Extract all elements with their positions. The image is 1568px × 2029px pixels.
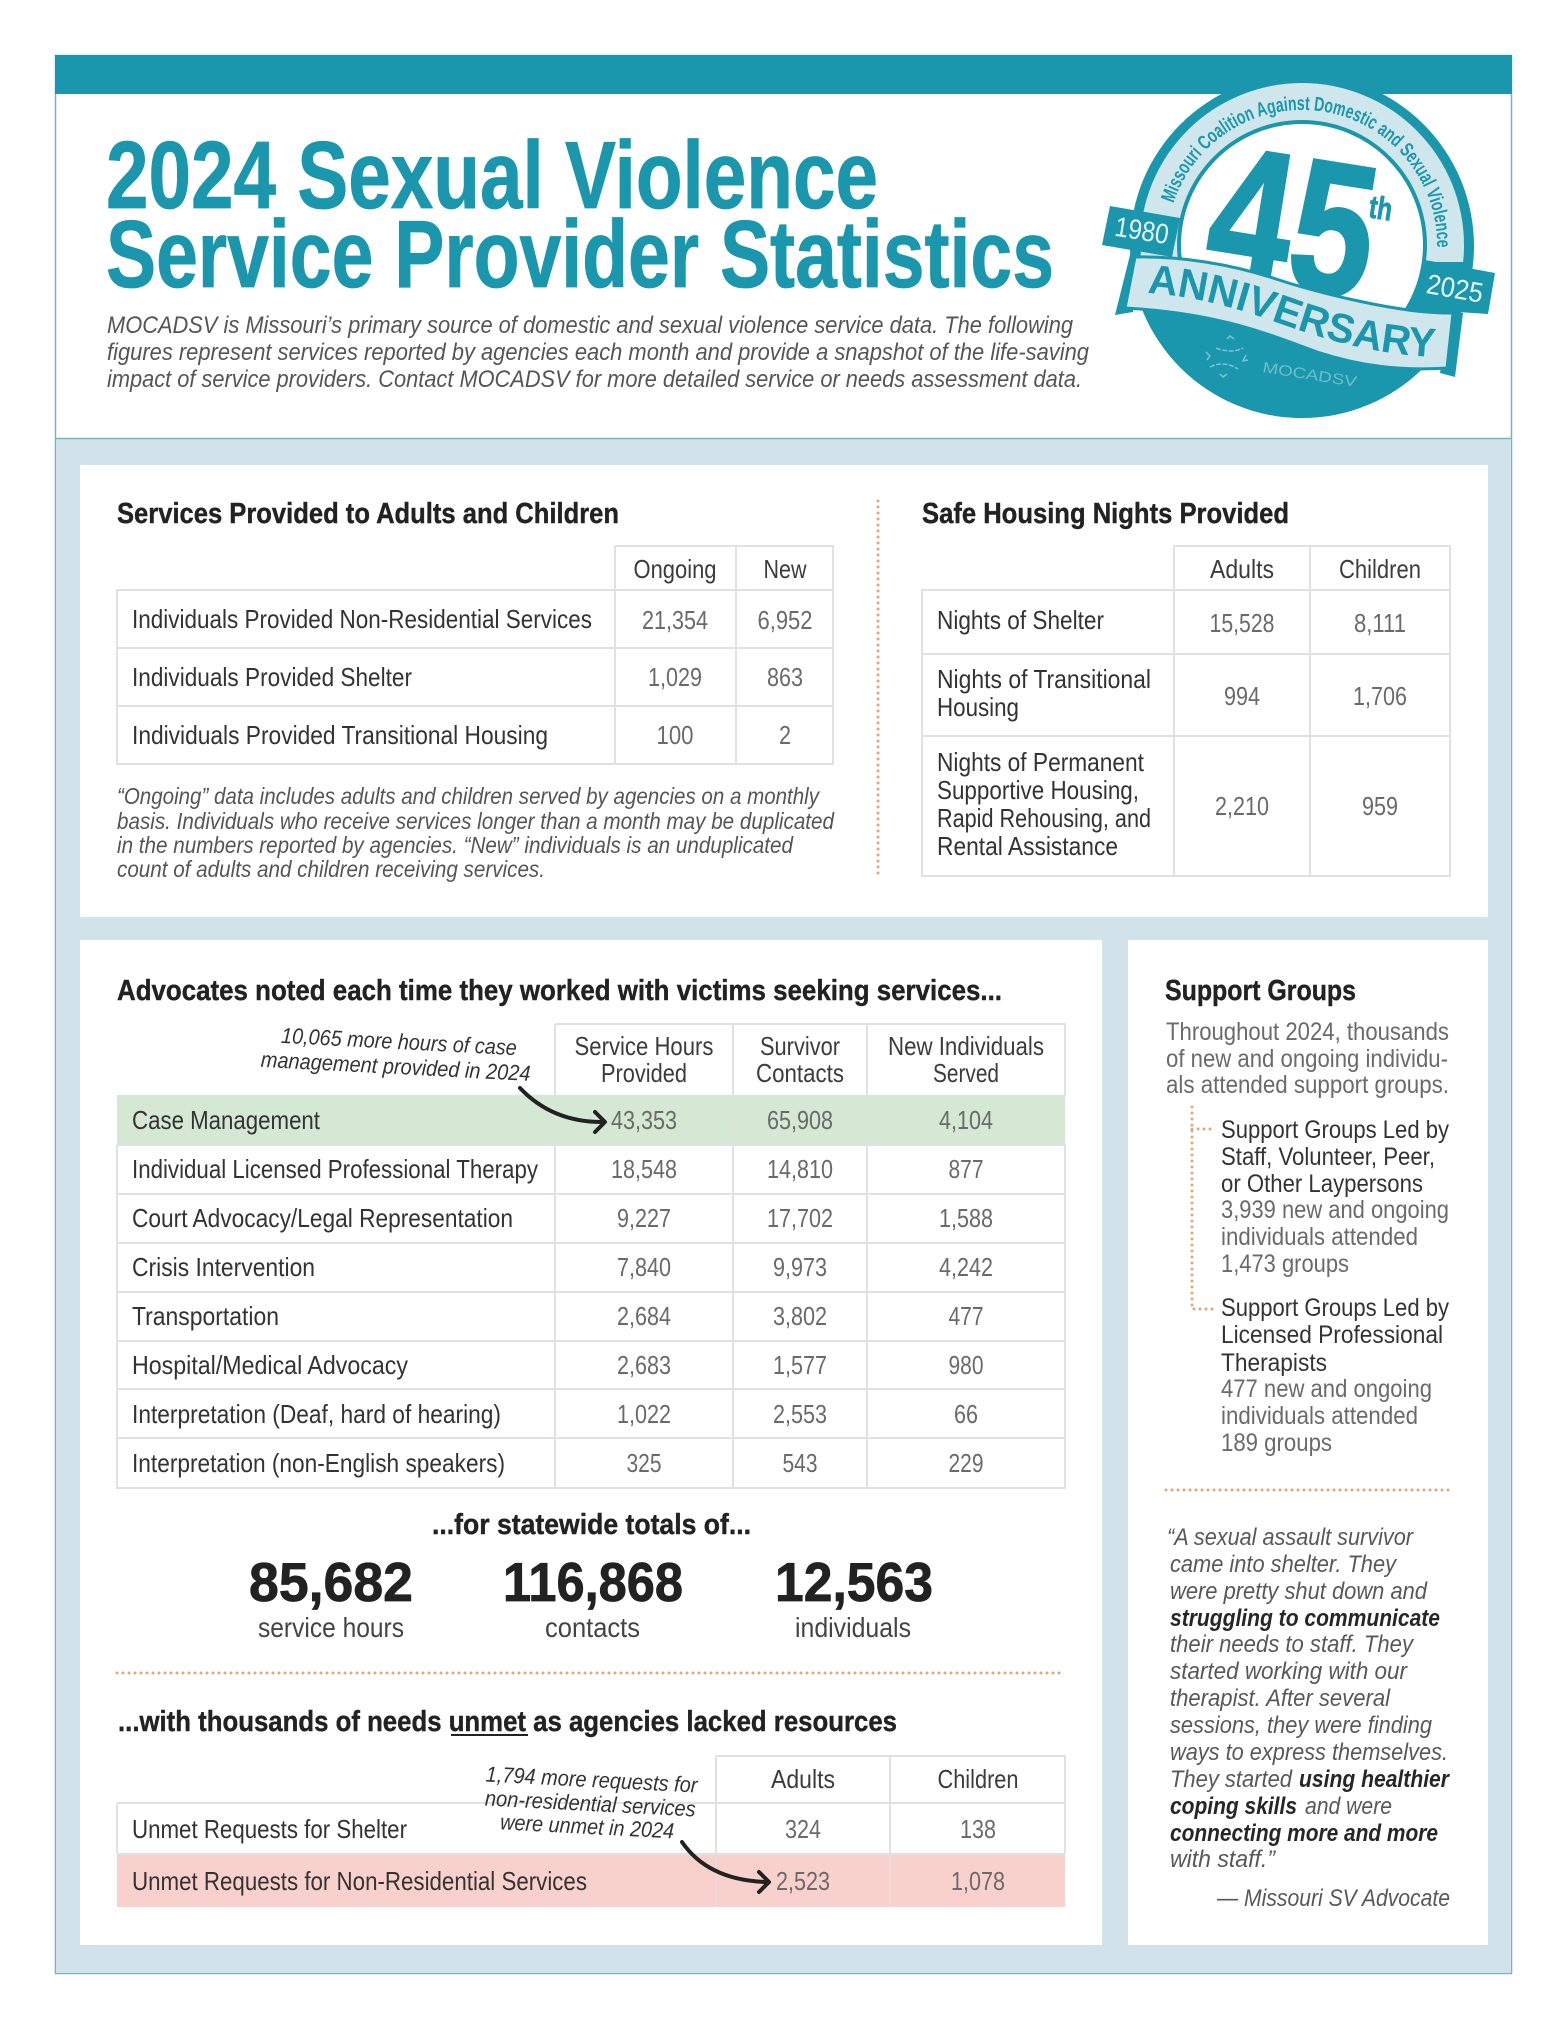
table: services by type: 66 bbox=[954, 1399, 978, 1429]
table: housing: Rapid Rehousing, and bbox=[937, 803, 1151, 833]
stat: contacts: contacts bbox=[545, 1612, 640, 1643]
table: unmet requests: 324 bbox=[785, 1814, 821, 1844]
table: services by type: 1,588 bbox=[939, 1203, 993, 1233]
support group item: lay led bbox=[1221, 1116, 1449, 1278]
table: unmet requests bbox=[117, 1756, 1065, 1907]
badge year tab 2025 bbox=[1412, 260, 1495, 314]
table: services by type: 877 bbox=[948, 1154, 984, 1184]
panel: support groups bbox=[1128, 940, 1488, 1945]
table: services: Individuals Provided Non-Residential Services bbox=[132, 604, 592, 634]
intro text bbox=[107, 312, 1090, 393]
table: services: Ongoing bbox=[634, 554, 716, 584]
quote: ways to express themselves. bbox=[1170, 1739, 1448, 1766]
quote: came into shelter. They bbox=[1170, 1551, 1398, 1578]
table: services: 6,952 bbox=[758, 605, 812, 635]
quote: sessions, they were finding bbox=[1170, 1712, 1433, 1739]
stat: service hours: service hours bbox=[258, 1612, 404, 1643]
table: services by type: Contacts bbox=[756, 1058, 844, 1088]
quote attribution: — Missouri SV Advocate bbox=[1216, 1885, 1450, 1912]
table: unmet requests: Unmet Requests for Shelter bbox=[132, 1814, 407, 1844]
intro text: impact of service providers. Contact MOCADSV for more detailed service or needs assessment data. bbox=[107, 366, 1082, 393]
table: housing: Nights of Permanent bbox=[937, 747, 1145, 777]
quote: therapist. After several bbox=[1170, 1685, 1391, 1712]
support group item: lay led: or Other Laypersons bbox=[1221, 1170, 1423, 1198]
table: services by type: Court Advocacy/Legal Representation bbox=[132, 1203, 513, 1233]
support group item: therapist led: Licensed Professional bbox=[1221, 1321, 1443, 1349]
table: services by type: Served bbox=[933, 1058, 999, 1088]
support group item: lay led: Support Groups Led by bbox=[1221, 1116, 1449, 1144]
table: services by type: 477 bbox=[948, 1301, 984, 1331]
table: unmet requests: Children bbox=[938, 1764, 1018, 1794]
table: housing: 15,528 bbox=[1210, 608, 1274, 638]
table: services by type: 980 bbox=[948, 1350, 984, 1380]
table: services by type: Crisis Intervention bbox=[132, 1252, 315, 1282]
table: housing: Housing bbox=[937, 692, 1019, 722]
quote: using healthier bbox=[1299, 1766, 1450, 1793]
table: services by type: Individual Licensed Professional Therapy bbox=[132, 1154, 538, 1184]
table: housing bbox=[922, 546, 1450, 876]
icon: 45th anniversary badge bbox=[1102, 83, 1495, 418]
header bbox=[106, 122, 1090, 393]
callout: unmet requests: non-residential services bbox=[484, 1786, 696, 1822]
highlight row: case management bbox=[117, 1095, 1065, 1145]
quote: started working with our bbox=[1170, 1658, 1408, 1685]
title: Service Provider Statistics bbox=[106, 201, 1054, 308]
table: services by type: 325 bbox=[626, 1448, 662, 1478]
intro text: figures represent services reported by agencies each month and provide a snapshot of the life-saving bbox=[107, 339, 1090, 366]
heading: housing: Safe Housing Nights Provided bbox=[922, 498, 1289, 530]
badge faint logo bbox=[1206, 336, 1358, 391]
table: housing: Rental Assistance bbox=[937, 831, 1118, 861]
quote: connecting more and more bbox=[1170, 1820, 1438, 1847]
callout: unmet requests: were unmet in 2024 bbox=[500, 1809, 675, 1843]
support group item: lay led: individuals attended bbox=[1221, 1223, 1418, 1251]
intro text: MOCADSV is Missouri’s primary source of domestic and sexual violence service data. The following bbox=[107, 312, 1074, 339]
quote: with staff.” bbox=[1170, 1846, 1276, 1873]
callout: case management hours: 10,065 more hours of case bbox=[280, 1023, 517, 1060]
support group item: lay led: Staff, Volunteer, Peer, bbox=[1221, 1143, 1435, 1171]
callout: case management hours bbox=[260, 1022, 532, 1086]
table: services by type: 2,684 bbox=[617, 1301, 671, 1331]
badge ordinal: th bbox=[1367, 189, 1395, 228]
table: services: 100 bbox=[656, 720, 694, 750]
table: services: New bbox=[764, 554, 807, 584]
table: services by type: 1,577 bbox=[773, 1350, 827, 1380]
support groups intro: als attended support groups. bbox=[1166, 1071, 1449, 1099]
table: services by type: 1,022 bbox=[617, 1399, 671, 1429]
table: housing: 8,111 bbox=[1354, 608, 1406, 638]
table: services by type: 14,810 bbox=[767, 1154, 833, 1184]
top teal bar bbox=[55, 55, 1512, 94]
table: services by type: Transportation bbox=[132, 1301, 279, 1331]
title bbox=[106, 122, 1054, 308]
badge year tab 1980: 1980 bbox=[1113, 211, 1171, 250]
badge ring text: Missouri Coalition Against Domestic and Sexual Violence bbox=[1160, 96, 1448, 247]
callout: unmet requests bbox=[483, 1762, 700, 1845]
support groups intro bbox=[1166, 1018, 1449, 1099]
footnote: in the numbers reported by agencies. “New” individuals is an unduplicated bbox=[117, 832, 794, 858]
stat: service hours bbox=[249, 1551, 413, 1643]
table: services by type: 2,553 bbox=[773, 1399, 827, 1429]
table: housing: 959 bbox=[1362, 791, 1398, 821]
table: services: Individuals Provided Transitional Housing bbox=[132, 720, 548, 750]
table: housing: Supportive Housing, bbox=[937, 775, 1139, 805]
footnote bbox=[117, 783, 835, 882]
table: services: 2 bbox=[779, 720, 791, 750]
badge ribbon text: ANNIVERSARY bbox=[1148, 266, 1436, 356]
heading: statewide totals: ...for statewide totals of... bbox=[432, 1509, 751, 1541]
highlight row: non-residential bbox=[117, 1854, 1065, 1907]
heading: services: Services Provided to Adults and Children bbox=[117, 498, 619, 530]
stat: contacts bbox=[503, 1551, 683, 1643]
support group item: lay led: 3,939 new and ongoing bbox=[1221, 1196, 1449, 1224]
footnote: “Ongoing” data includes adults and children served by agencies on a monthly bbox=[117, 783, 820, 809]
table: services by type: 4,104 bbox=[939, 1105, 993, 1135]
table: housing: 2,210 bbox=[1215, 791, 1269, 821]
heading: advocates: Advocates noted each time they worked with victims seeking services... bbox=[117, 975, 1002, 1007]
table: services by type: Hospital/Medical Advocacy bbox=[132, 1350, 408, 1380]
support group item: therapist led bbox=[1221, 1294, 1449, 1457]
table: services by type: Interpretation (Deaf, hard of hearing) bbox=[132, 1399, 501, 1429]
table: services by type: 229 bbox=[948, 1448, 984, 1478]
table: services by type: Service Hours bbox=[574, 1031, 714, 1061]
quote: “A sexual assault survivor bbox=[1167, 1524, 1414, 1551]
table: services bbox=[117, 546, 833, 764]
table: services by type: Interpretation (non-English speakers) bbox=[132, 1448, 505, 1478]
footnote: basis. Individuals who receive services longer than a month may be duplicated bbox=[117, 808, 835, 834]
table: services by type: Provided bbox=[601, 1058, 687, 1088]
table: housing: 994 bbox=[1224, 681, 1260, 711]
table: housing: 1,706 bbox=[1353, 681, 1407, 711]
support groups intro: Throughout 2024, thousands bbox=[1166, 1018, 1449, 1046]
support group item: therapist led: Therapists bbox=[1221, 1349, 1327, 1377]
badge faint logo: MOCADSV bbox=[1261, 359, 1358, 391]
callout: unmet requests: 1,794 more requests for bbox=[485, 1762, 700, 1798]
quote: their needs to staff. They bbox=[1170, 1631, 1415, 1658]
table: services by type: New Individuals bbox=[888, 1031, 1044, 1061]
quote: struggling to communicate bbox=[1170, 1605, 1440, 1632]
table: housing: Adults bbox=[1210, 554, 1274, 584]
footnote: count of adults and children receiving services. bbox=[117, 856, 545, 882]
quote: They started bbox=[1170, 1766, 1293, 1793]
table: services by type: 3,802 bbox=[773, 1301, 827, 1331]
table: services: 863 bbox=[767, 662, 803, 692]
panel: advocates bbox=[80, 940, 1102, 1945]
stat: individuals bbox=[775, 1551, 933, 1643]
stat: individuals: individuals bbox=[795, 1612, 911, 1643]
panel: services and housing bbox=[80, 465, 1488, 917]
support group item: therapist led: 477 new and ongoing bbox=[1221, 1375, 1432, 1403]
table: services by type: 65,908 bbox=[767, 1105, 833, 1135]
table: unmet requests: 138 bbox=[960, 1814, 996, 1844]
table: services by type: 18,548 bbox=[611, 1154, 677, 1184]
table: services by type: 7,840 bbox=[617, 1252, 671, 1282]
table: services by type: 2,683 bbox=[617, 1350, 671, 1380]
heading: unmet needs: ...with thousands of needs unmet as agencies lacked resources bbox=[118, 1706, 897, 1738]
title: 2024 Sexual Violence bbox=[106, 122, 878, 229]
stat: service hours: 85,682 bbox=[249, 1551, 413, 1613]
table: services by type: 9,227 bbox=[617, 1203, 671, 1233]
arrow: non-residential bbox=[682, 1842, 769, 1892]
badge number 45: 45 bbox=[1195, 105, 1391, 341]
support group item: therapist led: Support Groups Led by bbox=[1221, 1294, 1449, 1322]
table: housing: Nights of Transitional bbox=[937, 664, 1151, 694]
table: housing: Children bbox=[1339, 554, 1421, 584]
badge year tab 2025: 2025 bbox=[1424, 268, 1486, 309]
table: services by type: 9,973 bbox=[773, 1252, 827, 1282]
table: services: 1,029 bbox=[648, 662, 702, 692]
table: services by type: 17,702 bbox=[767, 1203, 833, 1233]
support group item: therapist led: 189 groups bbox=[1221, 1429, 1332, 1457]
stat: individuals: 12,563 bbox=[775, 1551, 933, 1613]
badge lower fill bbox=[1142, 310, 1421, 418]
table: services by type bbox=[117, 1024, 1065, 1488]
table: unmet requests: Unmet Requests for Non-Residential Services bbox=[132, 1866, 587, 1896]
table: services by type: Case Management bbox=[132, 1105, 321, 1135]
support groups intro: of new and ongoing individu- bbox=[1166, 1045, 1448, 1073]
table: services: Individuals Provided Shelter bbox=[132, 662, 412, 692]
support group item: lay led: 1,473 groups bbox=[1221, 1250, 1349, 1278]
heading: support groups: Support Groups bbox=[1165, 975, 1356, 1007]
table: services by type: 43,353 bbox=[611, 1105, 677, 1135]
table: unmet requests: 1,078 bbox=[951, 1866, 1005, 1896]
quote bbox=[1167, 1524, 1450, 1873]
table: services by type: 543 bbox=[782, 1448, 818, 1478]
badge ribbon bbox=[1115, 251, 1463, 377]
arrow: case management bbox=[520, 1088, 605, 1132]
table: services by type: 4,242 bbox=[939, 1252, 993, 1282]
table: housing: Nights of Shelter bbox=[937, 605, 1104, 635]
table: services by type: Survivor bbox=[760, 1031, 840, 1061]
stat: contacts: 116,868 bbox=[503, 1551, 683, 1613]
quote: were pretty shut down and bbox=[1170, 1578, 1428, 1605]
badge year tab 1980 bbox=[1102, 206, 1180, 257]
table: services: 21,354 bbox=[642, 605, 708, 635]
table: unmet requests: 2,523 bbox=[776, 1866, 830, 1896]
quote: coping skills bbox=[1170, 1793, 1297, 1820]
table: unmet requests: Adults bbox=[771, 1764, 835, 1794]
support group item: therapist led: individuals attended bbox=[1221, 1402, 1418, 1430]
quote: and were bbox=[1305, 1793, 1392, 1820]
callout: case management hours: management provided in 2024 bbox=[260, 1047, 531, 1086]
